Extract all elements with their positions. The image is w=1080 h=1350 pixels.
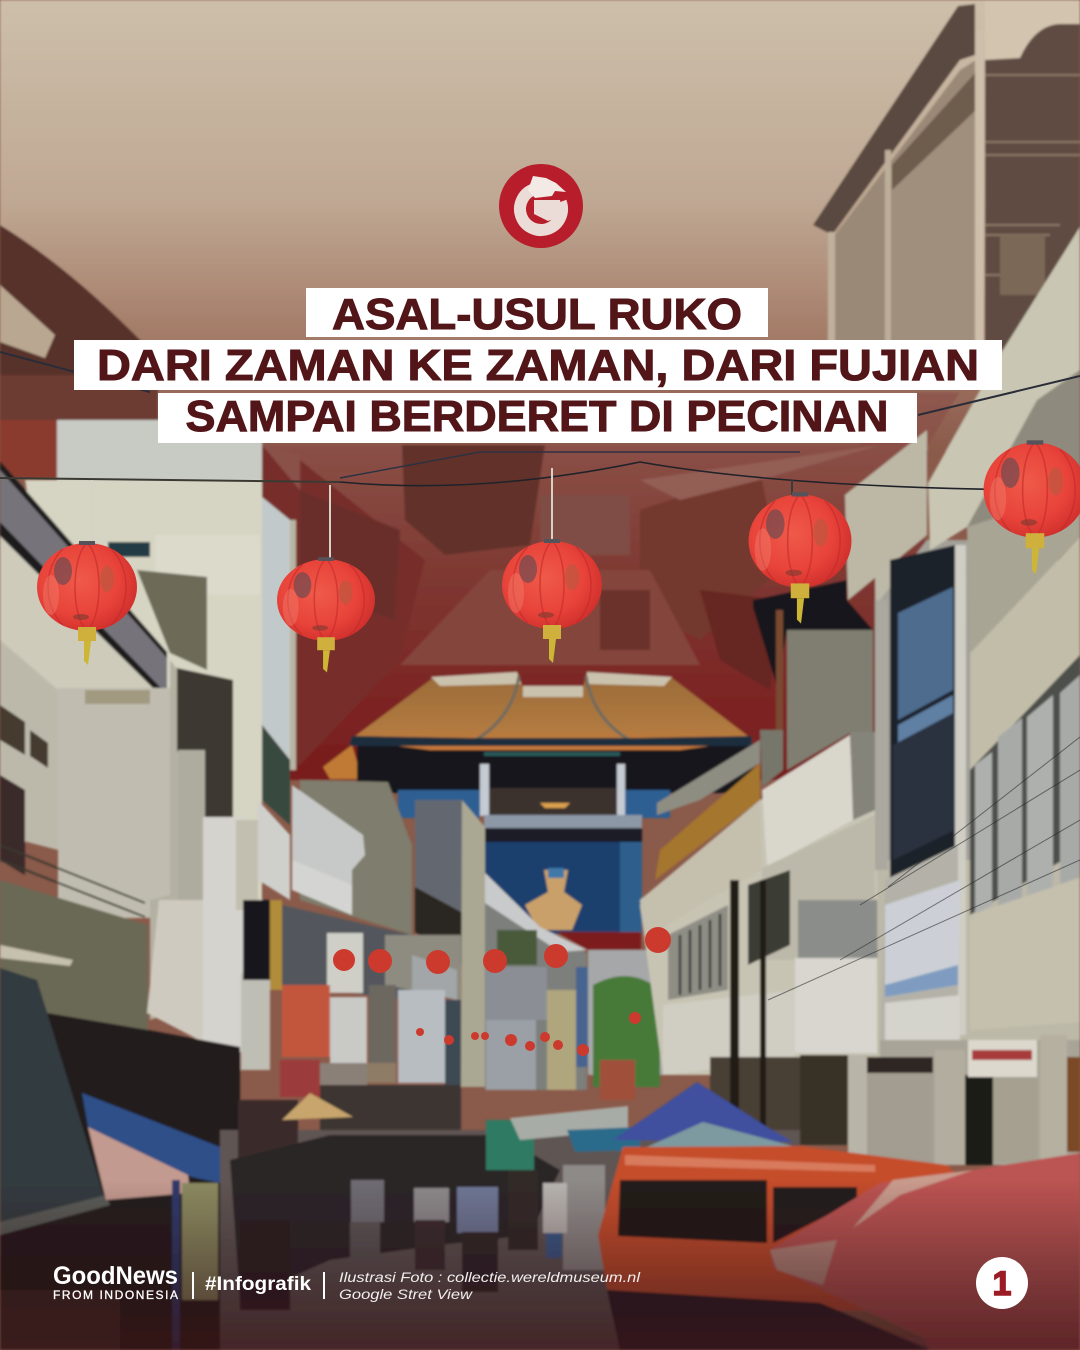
lantern 3 [502,539,602,663]
right foreground buildings [845,227,1080,1165]
overhead wires [0,352,1080,1000]
small distant lanterns [333,927,671,1056]
red market umbrella [770,1153,1080,1350]
title text: SAMPAI BERDERET DI PECINAN [186,392,889,441]
footer dividers [192,1272,325,1299]
lantern 5 [984,440,1080,574]
title text [97,290,979,441]
top left sepia roof [0,225,158,420]
logo [499,164,583,248]
top right sepia building [813,0,1080,350]
old street photo in maroon [258,392,960,780]
page number badge [976,1257,1028,1309]
photo credit: Google Stret View [339,1287,474,1302]
photo credit [339,1270,641,1302]
brand logo text [53,1262,178,1302]
lantern 1 [37,541,137,665]
red minivan [598,1146,1000,1350]
road and crowd [220,1082,800,1350]
Chinese temple [323,672,753,950]
right middle buildings [640,580,880,1155]
page number badge: 1 [993,1265,1011,1303]
lantern 4 [748,492,852,624]
brand logo text: GoodNews [53,1262,178,1290]
left foreground buildings [0,420,296,1350]
title: line backgrounds [74,288,1002,443]
central rows of shophouses [270,780,663,1153]
hashtag: #Infografik [205,1274,311,1295]
lantern 2 [277,557,375,673]
photo credit: Ilustrasi Foto : collectie.wereldmuseum.nl [339,1270,641,1285]
title text: ASAL-USUL RUKO [332,290,742,339]
sky background [0,0,1080,450]
brand logo text: FROM INDONESIA [53,1288,178,1302]
title text: DARI ZAMAN KE ZAMAN, DARI FUJIAN [97,341,979,390]
bottom vignette [0,1180,1080,1350]
